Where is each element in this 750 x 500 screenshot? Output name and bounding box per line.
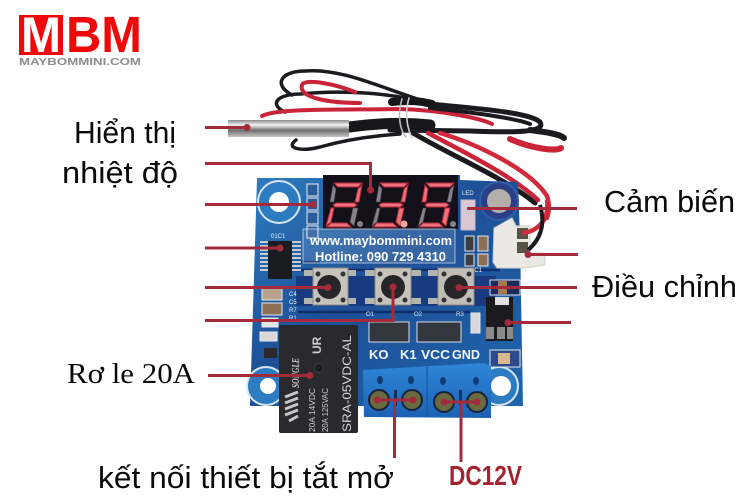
label: Rơ le 20A: Rơ le 20A	[67, 358, 195, 390]
white sensor connector	[493, 218, 545, 268]
SMD components: R7	[289, 308, 297, 314]
leader: probe	[205, 124, 250, 131]
label: Hiển thị: Hiển thị	[74, 115, 176, 150]
logo: MBM maybommini.com: M	[21, 7, 61, 63]
label: DC12V: DC12V	[449, 460, 522, 491]
leader: header pins	[205, 201, 316, 208]
mounting hole top left	[258, 181, 300, 223]
logo: MBM maybommini.com: BM	[66, 6, 142, 63]
decimal point	[400, 220, 408, 228]
logo: MBM maybommini.com: MAYBOMMINI.COM	[19, 56, 141, 68]
push button left	[313, 268, 348, 305]
leader: IC	[205, 244, 284, 252]
digit 1	[326, 183, 362, 227]
push button right	[438, 268, 474, 305]
digit 2	[372, 183, 408, 227]
watermark: website and hotline	[303, 229, 455, 264]
push button middle	[375, 268, 411, 305]
SMD components: C4	[289, 292, 297, 298]
watermark: website and hotline: Hotline: 090 729 4310	[315, 249, 446, 264]
SMD components: LED	[462, 191, 474, 197]
label: nhiệt độ: nhiệt độ	[62, 155, 178, 190]
LED display	[323, 175, 458, 229]
leader: regulator	[504, 319, 571, 326]
SMD components: R2 C1	[465, 268, 483, 274]
logo: MBM maybommini.com	[19, 6, 142, 68]
leader: relay	[208, 372, 314, 379]
relay	[279, 325, 358, 433]
pin labels: K1	[400, 347, 417, 362]
PCB board	[247, 175, 523, 406]
leader: display	[205, 164, 374, 194]
watermark: website and hotline: www.maybommini.com	[309, 233, 452, 248]
pin labels	[369, 347, 480, 362]
pin labels: KO	[369, 347, 388, 362]
IC chip: 01C1	[271, 234, 286, 240]
SMD components	[260, 191, 520, 367]
sensor cable	[262, 71, 564, 218]
relay: UR	[310, 336, 324, 354]
temperature probe	[228, 120, 349, 137]
relay: SRA-05VDC-AL	[340, 335, 354, 432]
SMD components: O2	[414, 312, 423, 318]
leader: DC12V terminals	[440, 398, 480, 462]
IC chip	[260, 234, 301, 279]
pin labels: VCC	[421, 347, 451, 362]
SMD components: R3	[456, 312, 464, 318]
SMD components: R1	[289, 316, 297, 322]
connector wires	[522, 200, 547, 250]
mounting hole top right	[480, 182, 518, 220]
mounting hole bottom right	[480, 367, 518, 405]
SMD components: O1	[366, 312, 375, 318]
label: Cảm biến: Cảm biến	[604, 184, 735, 219]
header pins	[307, 184, 318, 238]
relay: SONGLE	[291, 358, 302, 388]
mounting hole bottom left	[247, 367, 285, 405]
leader: LED	[467, 207, 577, 210]
digit 3	[418, 183, 454, 227]
relay: 20A 125VAC	[321, 388, 330, 432]
label: kết nối thiết bị tắt mở: kết nối thiết bị tắt mở	[98, 460, 394, 495]
label: Điều chỉnh: Điều chỉnh	[592, 269, 737, 304]
screw terminal	[363, 363, 491, 418]
pin labels: GND	[452, 347, 480, 362]
brand stripes	[285, 392, 298, 421]
leader: left button	[205, 284, 332, 291]
leader: output terminals	[374, 396, 416, 458]
leader: middle button	[205, 284, 396, 320]
relay: 20A 14VDC	[308, 388, 317, 432]
SMD components: C5	[289, 300, 297, 306]
leader: connector	[524, 251, 578, 258]
leader: right button	[456, 284, 577, 291]
